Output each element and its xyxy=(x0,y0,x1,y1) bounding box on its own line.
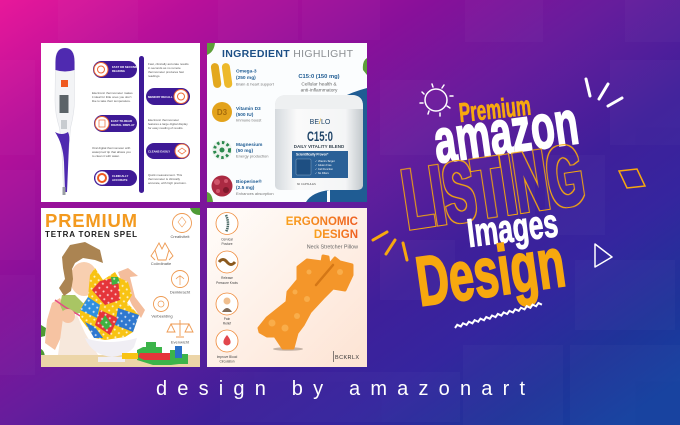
heading: PREMIUM xyxy=(45,210,137,231)
product jar xyxy=(275,95,363,190)
heading: ERGONOMIC xyxy=(286,216,358,228)
ingredient: bioperine: Enhances absorption xyxy=(236,191,274,196)
step 5 text: accurate, with high precision. xyxy=(148,181,187,185)
step 5 text: Quick measurement. This xyxy=(148,173,183,177)
heading xyxy=(286,216,358,250)
step 3 pill xyxy=(94,115,137,132)
benefit: verbeelding: Verbeelding xyxy=(151,314,173,318)
step 1 text: thermometer produces fast xyxy=(148,70,184,74)
benefit: pain relief: Relief xyxy=(223,322,231,326)
hair and ponytail xyxy=(59,242,103,296)
icon: digital thermometer xyxy=(55,48,74,195)
benefit: cervical posture: Posture xyxy=(222,242,233,246)
step 4 text: waterproof tip that allows you xyxy=(92,150,131,154)
hand xyxy=(61,309,75,323)
icon: play triangle xyxy=(595,244,612,267)
product jar: ✓ No Fillers xyxy=(315,171,330,175)
product jar: ✓ Gluten Free xyxy=(315,163,332,167)
benefit: pain relief: Pain xyxy=(224,317,230,321)
leaves xyxy=(207,43,367,202)
step 1 text: Fast, clinically accurate results xyxy=(148,62,189,66)
brand xyxy=(333,351,359,362)
benefit: improve blood circulation xyxy=(216,330,238,364)
product jar: Scientifically Proven* xyxy=(296,152,329,156)
ingredient: vitamin d3: Vitamin D3 xyxy=(236,106,261,112)
balance stand xyxy=(85,338,137,362)
benefit: denkkracht: Denkkracht xyxy=(170,290,191,294)
accent: top right dashes xyxy=(586,79,622,106)
product jar: DAILY VITALITY BLEND xyxy=(294,144,345,149)
ingredient: magnesium: Magnesium xyxy=(236,142,262,148)
panel: ergonomic design xyxy=(207,208,367,367)
accent: orange diamond xyxy=(619,169,645,188)
step 4 pill: CLEANS EASILY xyxy=(148,150,170,154)
step 2 text: it ideal for little ones you don't xyxy=(92,95,132,99)
benefit: improve blood circulation: Improve Blood xyxy=(217,355,237,359)
callout: c15:0: anti-inflammatory xyxy=(301,88,338,94)
panel: ingredient highlight xyxy=(207,43,367,202)
ingredient: magnesium xyxy=(212,140,268,160)
headline xyxy=(397,88,590,321)
step 3 text: for easy reading of results. xyxy=(148,126,184,130)
step 5 pill: ACCURATE xyxy=(112,178,128,182)
ingredient: vitamin d3: D3 xyxy=(217,108,228,117)
step 2 text: like to take their temperature. xyxy=(92,99,131,103)
leaves xyxy=(41,208,200,367)
step 2 pill xyxy=(146,88,190,105)
step 3 text: Electronic thermometer xyxy=(148,118,179,122)
benefit: coordinatie: Coördinatie xyxy=(151,261,172,266)
benefit list xyxy=(151,214,193,344)
table xyxy=(41,355,200,367)
raised arm xyxy=(118,268,145,318)
heading: TETRA TOREN SPEL xyxy=(45,230,137,239)
ingredient: omega-3: (250 mg) xyxy=(236,75,256,81)
ingredient: vitamin d3: (500 IU) xyxy=(236,112,254,118)
callout: c15:0: Cellular health & xyxy=(301,82,337,88)
accent: left orange dashes xyxy=(373,232,407,260)
product jar: 60 CAPSULES xyxy=(297,182,316,186)
ingredient: omega-3: Brain & heart support xyxy=(236,82,275,86)
benefit: release pressure knots xyxy=(216,251,238,285)
step 4 pill xyxy=(146,143,190,159)
step 5 text: thermometer is clinically xyxy=(148,177,181,181)
heading: DESIGN xyxy=(314,229,358,241)
timeline spine xyxy=(139,56,144,193)
child xyxy=(45,242,145,355)
benefit: improve blood circulation: Circulation xyxy=(219,360,235,364)
pink strap xyxy=(55,300,82,317)
tetra block tower xyxy=(80,268,139,340)
product jar: C15:0 xyxy=(307,128,333,144)
heading: INGREDIENT HIGHLIGHT xyxy=(222,48,354,60)
accent: zigzag underline xyxy=(454,302,542,328)
ingredient: omega-3 xyxy=(210,63,275,88)
benefit: creativiteit: Creativiteit xyxy=(171,234,190,239)
step 3 text: features a large digital display xyxy=(148,122,188,126)
benefit: cervical posture xyxy=(216,212,238,246)
step 3 pill: EASY-TO-READ xyxy=(111,119,132,123)
neck pillow product xyxy=(259,256,352,351)
benefit: evenwicht: Evenwicht xyxy=(171,340,190,344)
callout: c15:0: C15:0 (150 mg) xyxy=(298,74,340,80)
step 2 pill: MEMORY RECALL xyxy=(148,95,173,99)
ingredient: omega-3: Omega-3 xyxy=(236,68,257,74)
headline word: design: Design xyxy=(411,223,570,321)
product jar: BE/LO xyxy=(310,119,331,126)
ingredient: vitamin d3 xyxy=(212,102,262,122)
blue corner shape xyxy=(306,88,367,202)
step 2 text: Electronic thermometer makes xyxy=(92,91,133,95)
step 1 pill xyxy=(93,61,137,78)
panel: tetra toren spel xyxy=(41,208,200,367)
heading: Neck Stretcher Pillow xyxy=(307,244,358,250)
loose blocks xyxy=(137,342,188,365)
ingredient: magnesium: Energy production xyxy=(236,154,268,158)
ingredient: magnesium: (50 mg) xyxy=(236,148,253,154)
step 4 text: Oral digital thermometer with xyxy=(92,146,131,150)
step 5 pill: CLINICALLY xyxy=(112,174,129,178)
green top xyxy=(60,295,85,316)
ingredient: bioperine xyxy=(212,176,274,196)
shoulder and arm xyxy=(45,298,68,350)
step 1 text: readings. xyxy=(148,74,161,78)
step 3 pill: DIGITAL DISPLAY xyxy=(111,123,135,127)
headline word: premium: Premium xyxy=(457,91,532,128)
footer credit: design by amazonart xyxy=(156,378,525,400)
product jar: ✓ Cell Function xyxy=(315,167,334,171)
icon: sun xyxy=(420,84,453,116)
step 1 pill: READING xyxy=(112,69,125,73)
headline word: amazon: amazon xyxy=(429,88,583,177)
step 1 text: in seconds as no remote xyxy=(148,66,181,70)
ingredient: vitamin d3: Immune boost xyxy=(236,118,262,122)
panel: thermometer listing xyxy=(41,43,200,202)
step 5 pill xyxy=(94,170,137,186)
brand: BCKRLX xyxy=(335,355,359,361)
step 4 text: to clean it with water. xyxy=(92,154,120,158)
face xyxy=(70,262,98,296)
benefit: release pressure knots: Release xyxy=(221,276,233,280)
ingredient: bioperine: Bioperine® xyxy=(236,178,262,185)
step 1 pill: FAST OR SECOND xyxy=(112,65,137,69)
ingredient: bioperine: (2.5 mg) xyxy=(236,185,255,191)
headline word: images: Images xyxy=(465,201,560,256)
dress xyxy=(58,315,98,355)
benefit: cervical posture: Cervical xyxy=(221,238,233,242)
callout: c15:0 xyxy=(298,74,340,94)
product jar: ✓ Vitamin-Target xyxy=(315,159,335,163)
benefit: pain relief xyxy=(216,293,238,326)
benefit: release pressure knots: Pressure Knots xyxy=(216,281,238,285)
